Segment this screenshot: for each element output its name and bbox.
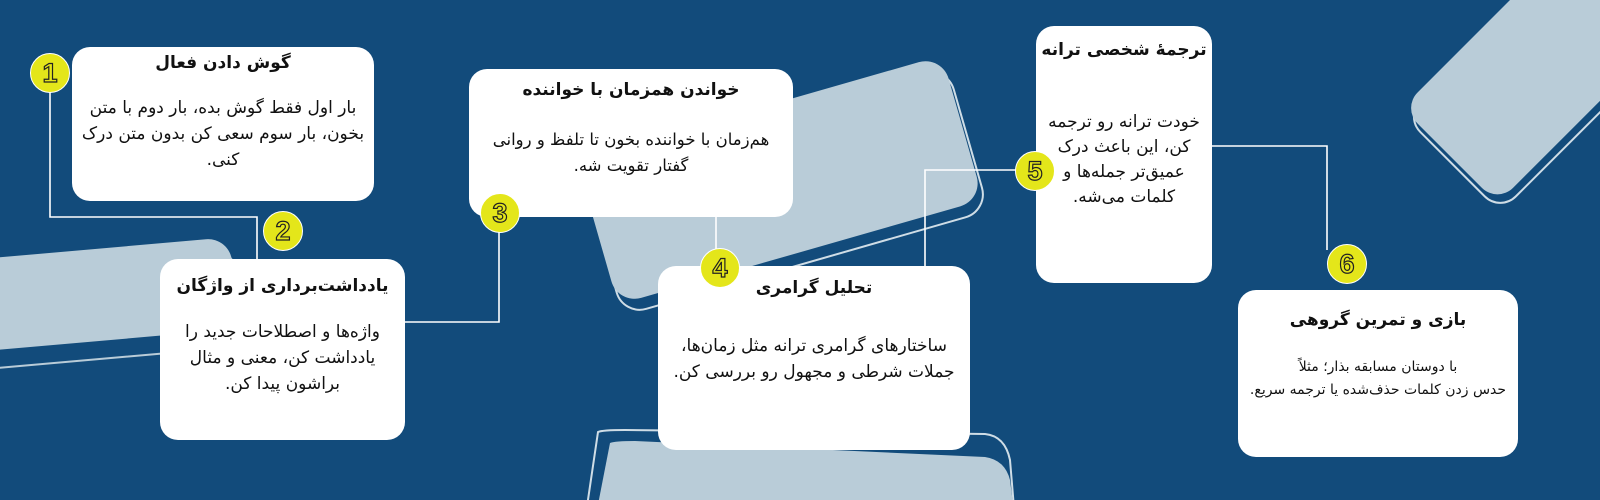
- text 4: جملات شرطی و مجهول رو بررسی کن.: [673, 362, 955, 382]
- badge 3: [480, 193, 520, 233]
- text 1: کنی.: [207, 150, 239, 170]
- text 2: یادداشت کن، معنی و مثال: [190, 348, 375, 368]
- heading 2: یادداشت‌برداری از واژگان: [176, 276, 389, 296]
- shape: left light block: [0, 237, 244, 378]
- badge 4: 4: [712, 253, 728, 283]
- heading 5: ترجمهٔ شخصی ترانه: [1041, 40, 1207, 60]
- text 1: [82, 98, 364, 170]
- text 5: کلمات می‌شه.: [1073, 187, 1175, 207]
- card 3: [469, 69, 793, 217]
- badge 1: [30, 53, 70, 93]
- text 4: ساختارهای گرامری ترانه مثل زمان‌ها،: [681, 336, 947, 356]
- text 4: [673, 336, 955, 382]
- card 6: [1238, 290, 1518, 457]
- text 2: واژه‌ها و اصطلاحات جدید را: [185, 322, 380, 342]
- badge 5: 5: [1027, 156, 1043, 186]
- text 5: خودت ترانه رو ترجمه: [1048, 112, 1200, 132]
- heading 4: تحلیل گرامری: [756, 278, 872, 298]
- text 5: عمیق‌تر جمله‌ها و: [1063, 162, 1185, 182]
- card 2: [160, 259, 405, 440]
- text 6: با دوستان مسابقه بذار؛ مثلاً: [1299, 359, 1457, 375]
- badge 1: 1: [42, 58, 58, 88]
- shape: middle light block: [577, 55, 989, 316]
- badge 6: [1327, 244, 1367, 284]
- text 2: براشون پیدا کن.: [225, 374, 340, 394]
- text 1: بخون، بار سوم سعی کن بدون متن درک: [82, 124, 364, 144]
- text 2: [185, 322, 380, 394]
- text 5: [1048, 112, 1200, 207]
- card 5: [1036, 26, 1212, 283]
- badge 5: [1015, 151, 1055, 191]
- card 1: [72, 47, 374, 201]
- text 6: [1250, 358, 1506, 398]
- heading 1: گوش دادن فعال: [155, 53, 291, 73]
- text 3: هم‌زمان با خواننده بخون تا تلفظ و روانی: [493, 130, 769, 149]
- card 4: [658, 266, 970, 450]
- heading 3: خواندن همزمان با خواننده: [522, 80, 740, 100]
- badge 6: 6: [1339, 249, 1355, 279]
- badge 4: [700, 248, 740, 288]
- badge 2: [263, 211, 303, 251]
- text 3: [493, 130, 769, 175]
- connectors: [50, 92, 1327, 322]
- text 5: کن، این باعث درک: [1058, 137, 1190, 157]
- text 6: حدس زدن کلمات حذف‌شده یا ترجمه سریع.: [1250, 382, 1506, 398]
- heading 6: بازی و تمرین گروهی: [1290, 310, 1466, 330]
- badge 3: 3: [492, 198, 508, 228]
- shape: bottom light block: [585, 430, 1015, 500]
- text 1: بار اول فقط گوش بده، بار دوم با متن: [90, 98, 356, 118]
- shape: top right light block: [1399, 0, 1600, 212]
- badge 2: 2: [275, 216, 291, 246]
- text 3: گفتار تقویت شه.: [574, 156, 688, 175]
